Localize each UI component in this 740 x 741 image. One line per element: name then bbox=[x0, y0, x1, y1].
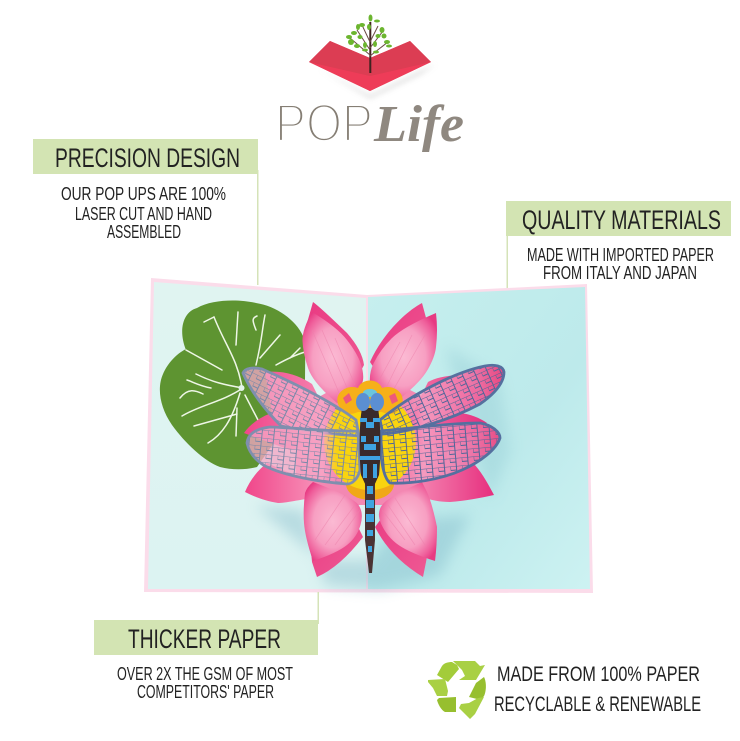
callout: precision design bbox=[33, 139, 258, 285]
card border bbox=[144, 278, 593, 593]
leaf veins bbox=[180, 312, 305, 443]
icon: recycle symbol bbox=[428, 661, 486, 719]
pop-up card photo bbox=[144, 278, 593, 593]
body text bbox=[61, 184, 226, 242]
body text: OVER 2X THE GSM OF MOST bbox=[117, 664, 293, 684]
flower center bbox=[324, 380, 416, 500]
petal striations bbox=[312, 330, 425, 545]
wing: lower left bbox=[247, 427, 360, 484]
dragonfly abdomen bbox=[365, 482, 375, 573]
logo shadow bbox=[318, 64, 436, 98]
connector line bbox=[318, 592, 319, 624]
logo wordmark: Life: Life bbox=[373, 96, 464, 153]
flower shadow bbox=[255, 505, 470, 590]
card right page bbox=[368, 287, 590, 589]
callout: thicker paper bbox=[94, 592, 319, 702]
body text: OUR POP UPS ARE 100% bbox=[61, 184, 226, 204]
logo wordmark: POP: POP bbox=[275, 94, 373, 153]
front petals bbox=[302, 312, 363, 403]
heading: THICKER PAPER bbox=[128, 624, 281, 654]
leaf center dot bbox=[238, 385, 244, 391]
lily pad leaf bbox=[160, 300, 305, 469]
petal underlay bbox=[296, 385, 450, 505]
connector line bbox=[506, 232, 508, 290]
heading: PRECISION DESIGN bbox=[55, 143, 240, 173]
heading band bbox=[33, 139, 258, 174]
body text bbox=[527, 245, 714, 283]
body text: ASSEMBLED bbox=[107, 222, 181, 242]
body text: COMPETITORS' PAPER bbox=[137, 682, 274, 702]
logo: Pop Life bbox=[275, 14, 464, 153]
recycling statement bbox=[494, 663, 701, 716]
connector line bbox=[257, 170, 258, 285]
heading band bbox=[506, 201, 731, 236]
wing: lower right bbox=[381, 423, 500, 483]
side petals bbox=[245, 463, 316, 503]
dragonfly thorax bbox=[360, 408, 380, 486]
card left page bbox=[148, 282, 366, 589]
heading band bbox=[94, 620, 318, 655]
body text bbox=[117, 664, 293, 702]
logo: tree bbox=[346, 14, 392, 73]
callout: quality materials bbox=[506, 201, 731, 290]
logo: red open book bbox=[309, 41, 431, 91]
dragonfly bbox=[243, 365, 504, 573]
body text: LASER CUT AND HAND bbox=[75, 204, 212, 224]
back petals bbox=[305, 302, 364, 400]
flower petals bbox=[244, 302, 494, 577]
wing: upper right bbox=[380, 365, 504, 434]
wing: upper left bbox=[243, 368, 359, 436]
dragonfly head bbox=[356, 389, 384, 411]
